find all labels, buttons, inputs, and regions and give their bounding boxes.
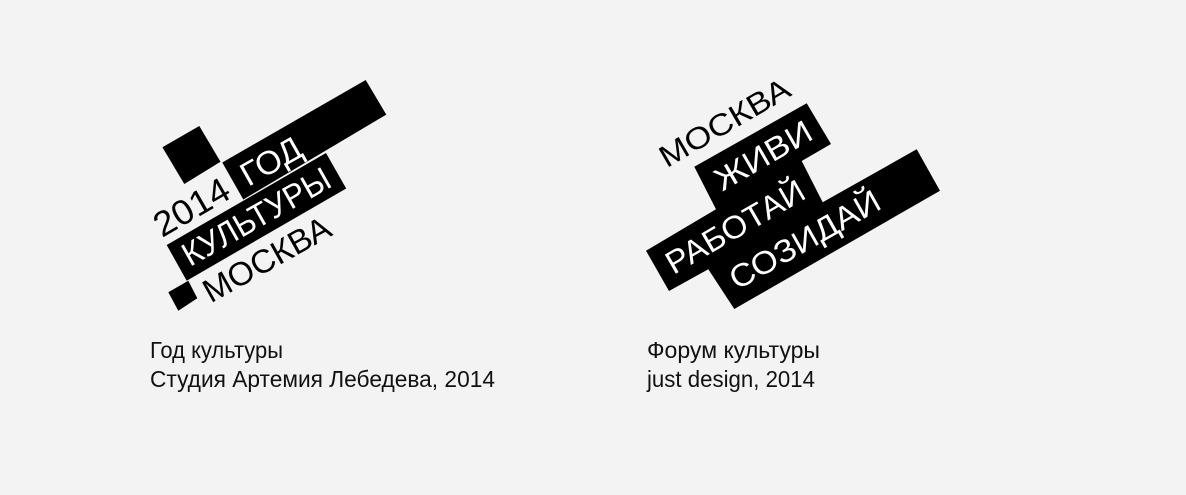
caption: right logo [646, 337, 820, 392]
logo: Год культуры [146, 80, 386, 311]
text: ГОД: ГОД [234, 129, 308, 193]
text: ЖИВИ: ЖИВИ [708, 113, 818, 198]
caption line: title: Год культуры [150, 337, 283, 363]
shape: top bar [222, 80, 386, 200]
text: РАБОТАЙ: РАБОТАЙ [659, 172, 811, 281]
logo: Форум культуры [646, 71, 940, 309]
text: КУЛЬТУРЫ: КУЛЬТУРЫ [175, 160, 337, 273]
shape: stepped black bars [646, 103, 940, 309]
text: МОСКВА: МОСКВА [196, 209, 337, 310]
text: СОЗИДАЙ: СОЗИДАЙ [723, 183, 887, 297]
text: МОСКВА: МОСКВА [653, 71, 797, 174]
caption: left logo [150, 337, 495, 392]
shape: small square [168, 281, 197, 311]
caption line: title: Форум культуры [647, 337, 820, 363]
caption line: author: just design, 2014 [646, 366, 815, 392]
shape: culture bar [167, 153, 346, 281]
text: 2014: 2014 [146, 170, 237, 245]
shape: large square [162, 126, 220, 184]
caption line: author: Студия Артемия Лебедева, 2014 [150, 366, 495, 392]
